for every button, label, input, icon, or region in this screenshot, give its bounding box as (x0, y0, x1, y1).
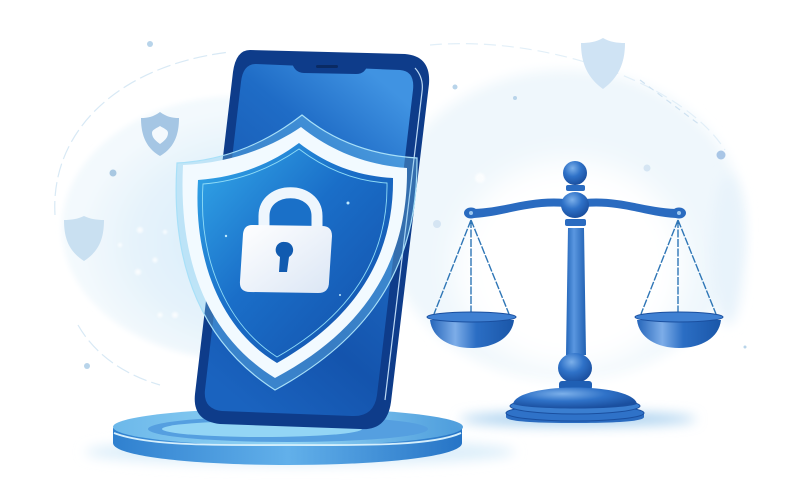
padlock (240, 193, 332, 293)
backdrop: pale blue glows (55, 44, 745, 385)
phone screen (205, 64, 413, 416)
phone body (195, 50, 429, 429)
scale shadow (460, 412, 696, 426)
chains (434, 220, 716, 316)
platform base (85, 408, 515, 465)
notch (291, 60, 368, 74)
phone (195, 50, 429, 429)
shield white border (182, 127, 407, 378)
security shield (176, 115, 417, 390)
lock body (240, 225, 332, 293)
icon: faint shield top right (581, 38, 625, 89)
icon: faint shield left (64, 216, 104, 261)
decorative particles (84, 41, 746, 369)
legal scales (427, 161, 723, 426)
beam end pivots (464, 208, 478, 218)
shackle (264, 193, 317, 230)
right pan (637, 320, 721, 348)
scale column (566, 228, 586, 355)
icon: small shield upper left (141, 112, 179, 156)
shield inner (197, 143, 393, 363)
left pan (430, 320, 514, 348)
scale beam (474, 199, 676, 218)
scale foot (506, 414, 644, 423)
shield glow (176, 115, 417, 390)
keyhole (276, 242, 293, 272)
phone edge highlight (385, 68, 422, 400)
